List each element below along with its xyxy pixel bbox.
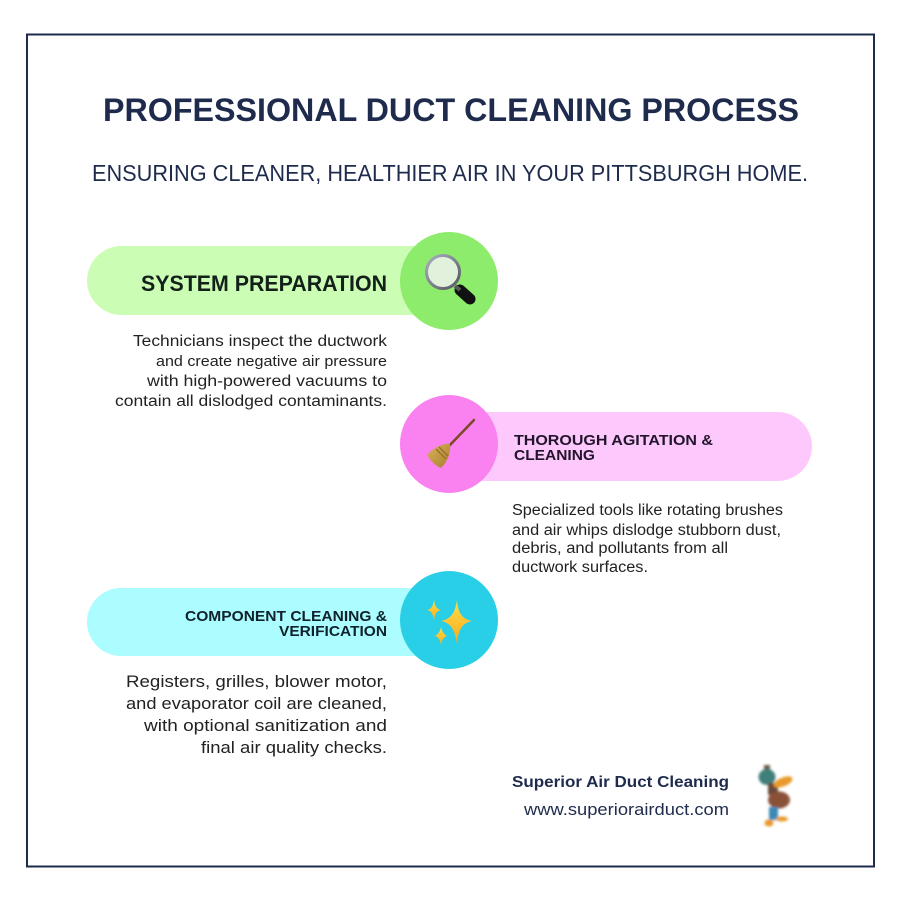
panel: component cleaning and verification — [87, 571, 498, 757]
heading: agitation: THOROUGH AGITATION & — [514, 432, 713, 449]
icon circle: cyan — [400, 571, 498, 669]
heading: component cleaning: VERIFICATION — [279, 623, 387, 640]
description: system preparation: and create negative air pressure — [156, 353, 387, 370]
panel: thorough agitation and cleaning — [400, 395, 812, 576]
description: component cleaning: Registers, grilles, blower motor, — [126, 673, 387, 691]
logo: duck mascot — [758, 765, 794, 826]
panel: system preparation — [87, 232, 498, 410]
heading: agitation: CLEANING — [514, 447, 595, 464]
heading: component cleaning — [185, 608, 387, 640]
description: system preparation — [115, 333, 387, 410]
subtitle: ENSURING CLEANER, HEALTHIER AIR IN YOUR PITTSBURGH HOME. — [92, 160, 808, 186]
description: component cleaning: final air quality checks. — [201, 739, 387, 757]
website: www.superiorairduct.com — [523, 800, 729, 819]
pill: agitation — [449, 412, 812, 481]
title: PROFESSIONAL DUCT CLEANING PROCESS — [103, 92, 799, 128]
company name: Superior Air Duct Cleaning — [512, 774, 729, 791]
description: agitation: ductwork surfaces. — [512, 559, 648, 576]
pill: component cleaning — [87, 588, 467, 656]
icon: sparkles — [427, 600, 472, 645]
description: system preparation: with high-powered vacuums to — [146, 373, 387, 390]
description: agitation — [512, 502, 783, 576]
icon circle: pink — [400, 395, 498, 493]
description: agitation: Specialized tools like rotating brushes — [512, 502, 783, 519]
heading: component cleaning: COMPONENT CLEANING & — [185, 608, 387, 625]
description: component cleaning — [126, 673, 387, 757]
description: component cleaning: and evaporator coil are cleaned, — [126, 695, 387, 713]
pill: system preparation — [87, 246, 467, 315]
heading: system preparation: SYSTEM PREPARATION — [141, 271, 387, 296]
description: system preparation: contain all dislodged contaminants. — [115, 393, 387, 410]
icon: broom — [427, 420, 474, 468]
icon: magnifying glass — [426, 256, 470, 299]
footer brand — [512, 765, 794, 826]
description: agitation: and air whips dislodge stubborn dust, — [512, 522, 781, 539]
description: system preparation: Technicians inspect the ductwork — [133, 333, 387, 350]
heading: agitation — [514, 432, 713, 464]
description: agitation: debris, and pollutants from all — [512, 540, 728, 557]
icon circle: green — [400, 232, 498, 330]
description: component cleaning: with optional sanitization and — [143, 717, 387, 735]
